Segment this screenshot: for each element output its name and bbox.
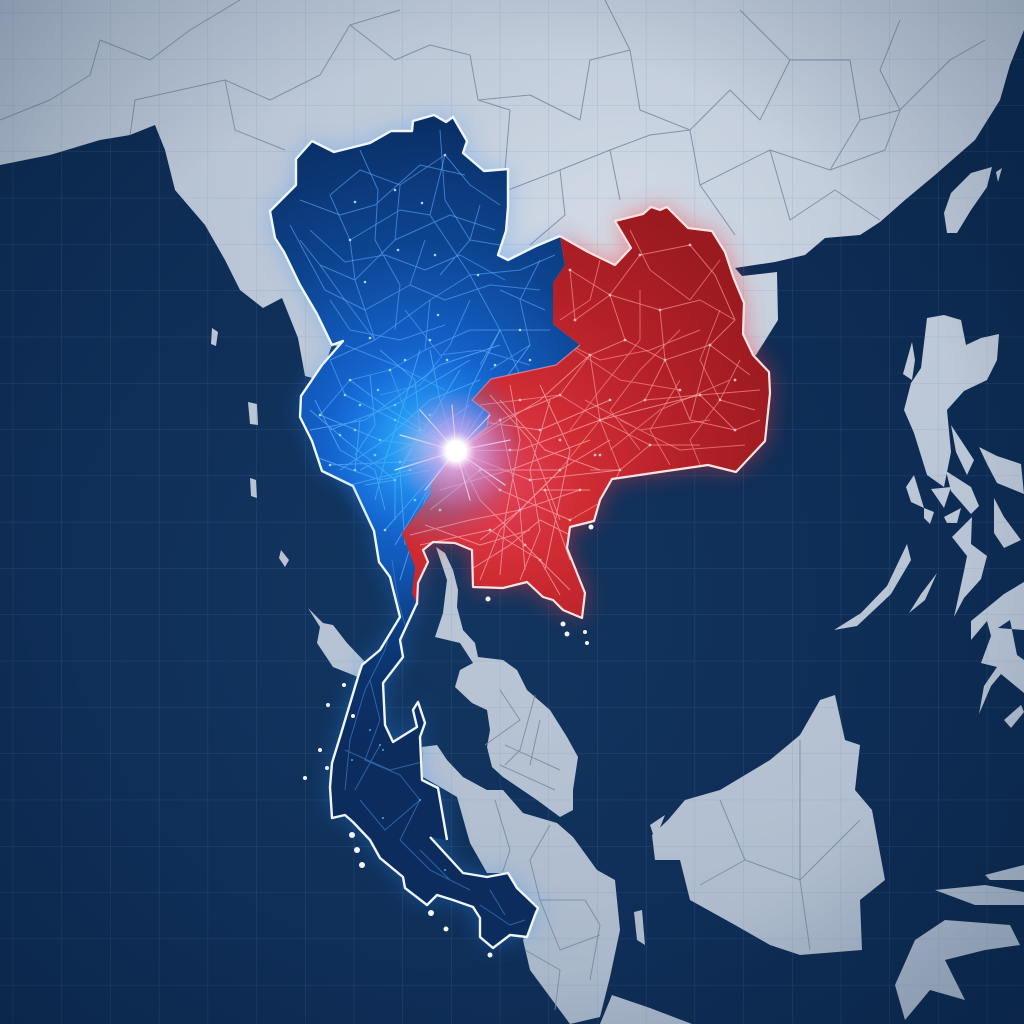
blue region fill [270,115,580,948]
red region network [410,230,760,595]
red region fill [402,207,770,618]
hub core [394,389,518,513]
boundary highlight between regions [456,345,580,451]
blue region glow [270,115,580,948]
red region [402,207,770,618]
red region glow [402,207,770,618]
blue region network [290,130,555,925]
western island [308,608,365,677]
south-eastern islands [634,815,1024,1020]
archipelago islands [834,425,1024,728]
hub rays [395,405,510,500]
Luzon-like island [903,315,999,487]
central glowing hub [325,345,525,545]
red region outline [417,207,770,618]
hub blue halo [325,345,525,545]
blue region outline [270,115,560,948]
blue peninsula shade [270,115,580,948]
small islands [211,328,289,567]
southern large island [422,745,620,1024]
coastal islets [303,524,594,958]
blue region [270,115,580,948]
mainland to the north [0,0,1024,400]
Taiwan-like island [944,167,1002,233]
central peninsula [435,547,578,817]
large eastern island [652,695,885,955]
bottom coast [600,995,692,1024]
Mindanao bay [998,620,1024,660]
